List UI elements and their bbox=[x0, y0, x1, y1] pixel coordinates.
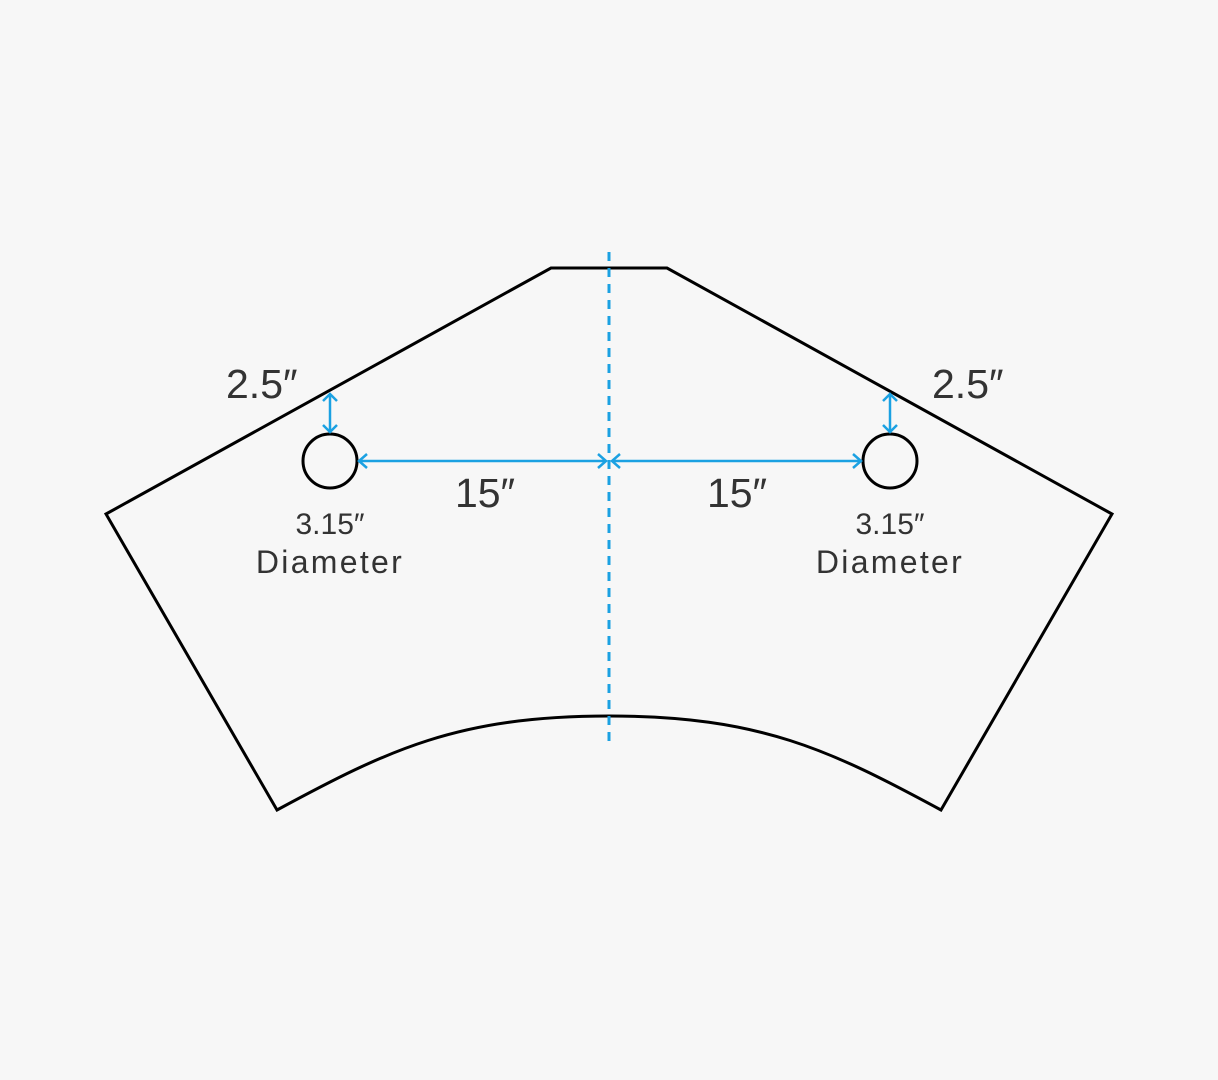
center dashed line bbox=[608, 252, 610, 742]
label: 2.5 left: 2.5″ bbox=[226, 361, 298, 407]
desk outline bbox=[106, 268, 1112, 810]
left hole: Diameter bbox=[256, 544, 404, 580]
label: 2.5 right: 2.5″ bbox=[932, 361, 1004, 407]
label: diameter left: 3.15″ bbox=[295, 508, 365, 541]
arrow: left 15 bbox=[359, 454, 606, 468]
right hole bbox=[612, 361, 1004, 580]
label: 15 left: 15″ bbox=[455, 470, 515, 516]
label: diameter right: 3.15″ bbox=[855, 508, 925, 541]
arrow: right 15 bbox=[612, 454, 861, 468]
arrow: left 2.5 bbox=[323, 394, 337, 432]
arrow: right 2.5 bbox=[883, 394, 897, 432]
label: 15 right: 15″ bbox=[707, 470, 767, 516]
left hole bbox=[226, 361, 606, 580]
right hole: Diameter bbox=[816, 544, 964, 580]
